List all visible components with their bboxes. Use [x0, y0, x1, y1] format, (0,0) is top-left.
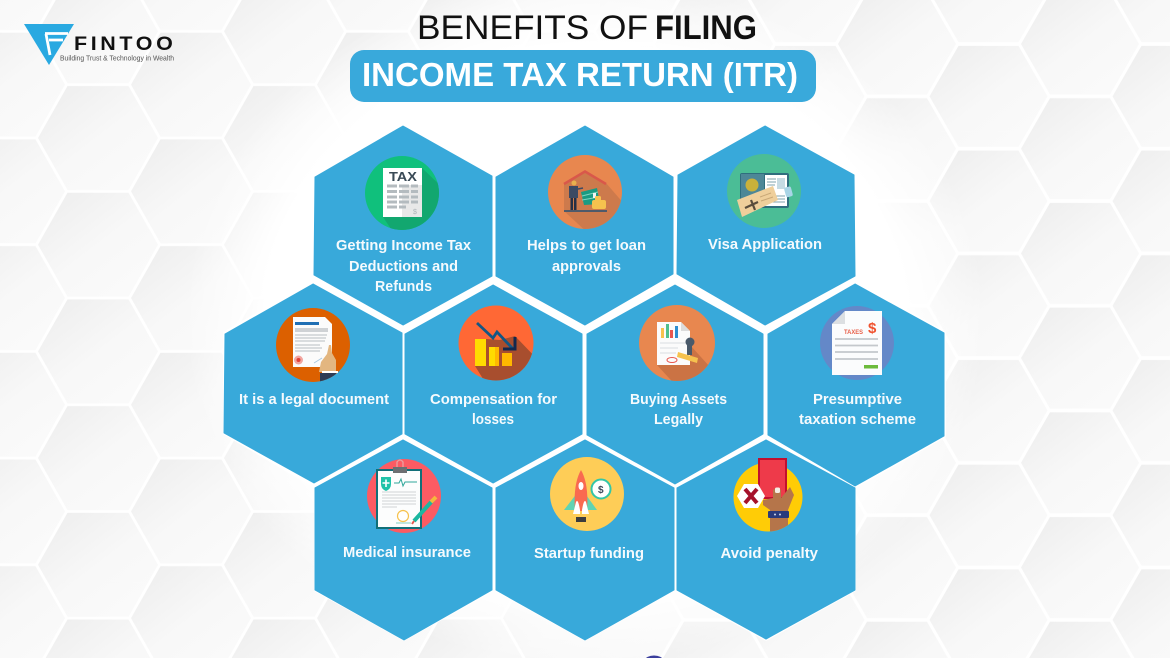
panel: Buying Assets Legally	[587, 285, 763, 484]
label	[336, 237, 472, 295]
white backing behind hexagon cluster	[223, 124, 946, 641]
icon: rocket and coin: $	[598, 485, 604, 496]
label	[630, 391, 727, 428]
panel: It is a legal document	[224, 284, 402, 483]
subtitle banner: INCOME TAX RETURN (ITR)	[362, 56, 798, 93]
icon: tax form: TAX	[389, 169, 417, 184]
label: Compensation for	[430, 391, 557, 408]
panel: Compensation for losses	[405, 285, 582, 483]
label: Startup funding	[534, 545, 644, 562]
panel: Medical insurance	[315, 440, 492, 640]
icon: tax sheet	[820, 306, 894, 380]
label: Deductions and	[349, 258, 458, 275]
label: taxation scheme	[799, 411, 916, 428]
icon: tax form	[365, 156, 439, 230]
logo: Fintoo: Building Trust & Technology in Wealth	[60, 54, 174, 62]
label	[799, 391, 916, 428]
label: Visa Application	[708, 236, 822, 253]
logo: Fintoo: FINTOO	[74, 34, 176, 55]
panel: Getting Income Tax Deductions and Refunds	[314, 126, 492, 325]
panel: Avoid penalty	[677, 440, 855, 639]
title	[417, 9, 757, 47]
subtitle banner	[350, 50, 816, 102]
logo: Fintoo	[24, 24, 176, 65]
label: Helps to get loan	[527, 237, 646, 254]
panel: Presumptive taxation scheme	[768, 284, 944, 486]
label: Refunds	[375, 278, 432, 295]
label	[430, 391, 557, 428]
icon: red card and hand	[734, 459, 802, 535]
panel: Helps to get loan approvals	[496, 126, 673, 325]
icon: rocket and coin	[550, 457, 624, 531]
label: losses	[472, 411, 514, 428]
icon: tax form: $	[413, 209, 417, 216]
label: approvals	[552, 258, 621, 275]
icon: tax sheet: $	[868, 320, 877, 337]
clipped mark at bottom edge	[645, 656, 663, 658]
label: Medical insurance	[343, 544, 471, 561]
title: FILING	[655, 9, 757, 47]
panel: Startup funding	[496, 440, 674, 640]
icon: stamped document	[639, 305, 715, 381]
label: Buying Assets	[630, 391, 727, 408]
icon: passport and ticket	[727, 154, 801, 228]
label: It is a legal document	[239, 391, 389, 408]
icon: medical clipboard	[367, 459, 441, 533]
label: Getting Income Tax	[336, 237, 472, 254]
label: Presumptive	[813, 391, 902, 408]
icon: signed document	[276, 308, 350, 382]
icon: falling bar chart	[458, 306, 534, 380]
panel: Visa Application	[677, 126, 855, 325]
icon: house and money	[548, 155, 622, 229]
label: Legally	[654, 411, 704, 428]
label: Avoid penalty	[720, 545, 819, 562]
title: BENEFITS OF	[417, 9, 648, 47]
label	[527, 237, 646, 275]
icon: tax sheet: TAXES	[844, 329, 864, 336]
